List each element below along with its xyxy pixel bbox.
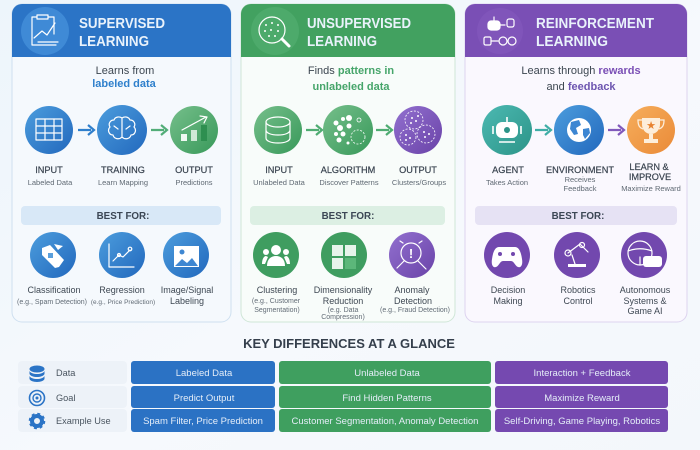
use case: anomaly detection: Anomaly [394, 285, 430, 295]
step: output: Clusters/Groups [392, 178, 446, 187]
use case: robotics control: Control [563, 296, 593, 306]
step: output: OUTPUT [175, 165, 213, 175]
use case: anomaly detection: (e.g., Fraud Detection) [380, 307, 450, 314]
step: learn and improve: ★ [646, 120, 656, 132]
step: output: OUTPUT [399, 165, 437, 175]
step: environment: ENVIRONMENT [546, 165, 614, 175]
use case: regression: Regression [99, 285, 145, 295]
use case: classification [17, 232, 87, 306]
step: agent: Takes Action [486, 178, 528, 187]
row: example use: Self-Driving, Game Playing, Robotics [504, 416, 660, 427]
header: supervised learning: SUPERVISED [79, 16, 165, 32]
row: goal: Find Hidden Patterns [342, 393, 432, 404]
use case: dimensionality reduction [314, 232, 373, 321]
title: key differences: KEY DIFFERENCES AT A GLANCE [243, 336, 455, 351]
use case: autonomous systems and game ai: Systems & [623, 296, 667, 306]
step: training [97, 105, 148, 187]
use case: robotics control [554, 232, 600, 306]
use case: image/signal labeling [161, 232, 213, 306]
use case: clustering: Clustering [257, 285, 297, 295]
arrow [608, 125, 624, 135]
step: learn and improve [621, 106, 681, 193]
flow: unsupervised steps [253, 105, 446, 187]
step: input [25, 106, 73, 187]
step: algorithm: ALGORITHM [321, 165, 375, 175]
flow: supervised steps [25, 105, 218, 187]
use case: decision making [484, 232, 530, 306]
best for: supervised: BEST FOR: [97, 211, 149, 222]
row: data: Unlabeled Data [354, 368, 420, 379]
tagline: supervised [92, 65, 157, 90]
best for: reinforcement [475, 206, 677, 225]
panel: reinforcement learning [465, 4, 687, 322]
tagline: unsupervised: unlabeled data [312, 81, 390, 93]
best for: unsupervised: BEST FOR: [322, 211, 374, 222]
use case: dimensionality reduction: Compression) [321, 314, 365, 321]
step: environment: Feedback [564, 184, 597, 193]
flow: reinforcement steps [482, 105, 681, 193]
use case: dimensionality reduction: Dimensionality [314, 285, 373, 295]
use case: robotics control: Robotics [560, 285, 596, 295]
step: input: INPUT [265, 165, 293, 175]
row: example use [18, 409, 668, 432]
panel: unsupervised learning [241, 4, 455, 322]
best for: supervised [21, 206, 221, 225]
header: unsupervised learning [241, 4, 455, 57]
use case: regression: (e.g., Price Prediction) [91, 299, 155, 306]
panel: supervised learning [12, 4, 231, 322]
header: unsupervised learning: UNSUPERVISED [307, 16, 411, 32]
use case: classification: (e.g., Spam Detection) [17, 299, 87, 306]
step: algorithm: Discover Patterns [319, 178, 379, 187]
step: training: TRAINING [101, 165, 145, 175]
use case: autonomous systems and game ai [620, 232, 671, 316]
tagline: supervised: Learns from [96, 65, 154, 77]
step: output [392, 106, 446, 187]
step: algorithm [319, 105, 379, 187]
use case: image/signal labeling: Labeling [170, 296, 204, 306]
step: training: Learn Mapping [98, 178, 148, 187]
use case: image/signal labeling: Image/Signal [161, 285, 213, 295]
row: goal [18, 386, 668, 408]
use case: autonomous systems and game ai: Game AI [627, 306, 663, 316]
step: input: Labeled Data [28, 178, 73, 187]
tagline: unsupervised: Finds patterns in [308, 65, 394, 77]
use case: decision making: Making [493, 296, 523, 306]
step: output [170, 106, 218, 187]
use case: decision making: Decision [491, 285, 525, 295]
row: data: Labeled Data [176, 368, 233, 379]
step: learn and improve: LEARN & [629, 162, 669, 172]
step: output: Predictions [175, 178, 213, 187]
step: learn and improve: IMPROVE [629, 172, 671, 182]
tagline: reinforcement: and feedback [546, 81, 616, 93]
use case: anomaly detection [380, 232, 450, 314]
tagline: reinforcement: Learns through rewards [521, 65, 641, 77]
step: environment: Receives [565, 175, 596, 184]
best for: reinforcement: BEST FOR: [552, 211, 604, 222]
header: reinforcement learning [465, 4, 687, 57]
header: supervised learning [12, 4, 231, 57]
arrow [78, 125, 94, 135]
use case: anomaly detection: Detection [394, 296, 432, 306]
header: reinforcement learning: REINFORCEMENT [536, 16, 654, 32]
step: input [253, 106, 306, 187]
use case: autonomous systems and game ai: Autonomous [620, 285, 671, 295]
row: data [18, 361, 668, 384]
step: environment [546, 105, 614, 193]
arrow [306, 125, 322, 135]
use case: clustering: (e.g., Customer [252, 298, 301, 305]
use case: clustering [252, 232, 301, 314]
row: example use: Example Use [56, 416, 111, 426]
header: reinforcement learning: LEARNING [536, 34, 608, 50]
step: learn and improve: Maximize Reward [621, 184, 681, 193]
step: input: Unlabeled Data [253, 178, 306, 187]
arrow [376, 125, 392, 135]
tagline: unsupervised [308, 65, 394, 93]
row: goal: Predict Output [174, 393, 235, 404]
row: goal: Goal [56, 393, 75, 403]
comparison table [18, 361, 668, 432]
use case: anomaly detection: ! [409, 246, 413, 261]
row: data: Data [56, 368, 76, 378]
row: goal: Maximize Reward [544, 393, 620, 404]
tagline: reinforcement [521, 65, 641, 93]
step: agent [482, 105, 532, 187]
tagline: supervised: labeled data [92, 78, 157, 90]
best for: unsupervised [250, 206, 445, 225]
row: example use: Customer Segmentation, Anomaly Detection [292, 416, 478, 427]
use case: regression [91, 232, 155, 306]
row: data: Interaction + Feedback [534, 368, 631, 379]
header: unsupervised learning: LEARNING [307, 34, 377, 50]
use case: dimensionality reduction: Reduction [323, 296, 363, 306]
row: example use: Spam Filter, Price Prediction [143, 416, 263, 427]
header: supervised learning: LEARNING [79, 34, 149, 50]
arrow [151, 125, 167, 135]
use case: clustering: Segmentation) [254, 307, 300, 314]
use case: classification: Classification [27, 285, 81, 295]
step: agent: AGENT [492, 165, 524, 175]
arrow [535, 125, 551, 135]
step: input: INPUT [35, 165, 63, 175]
use case: dimensionality reduction: (e.g. Data [328, 307, 358, 314]
